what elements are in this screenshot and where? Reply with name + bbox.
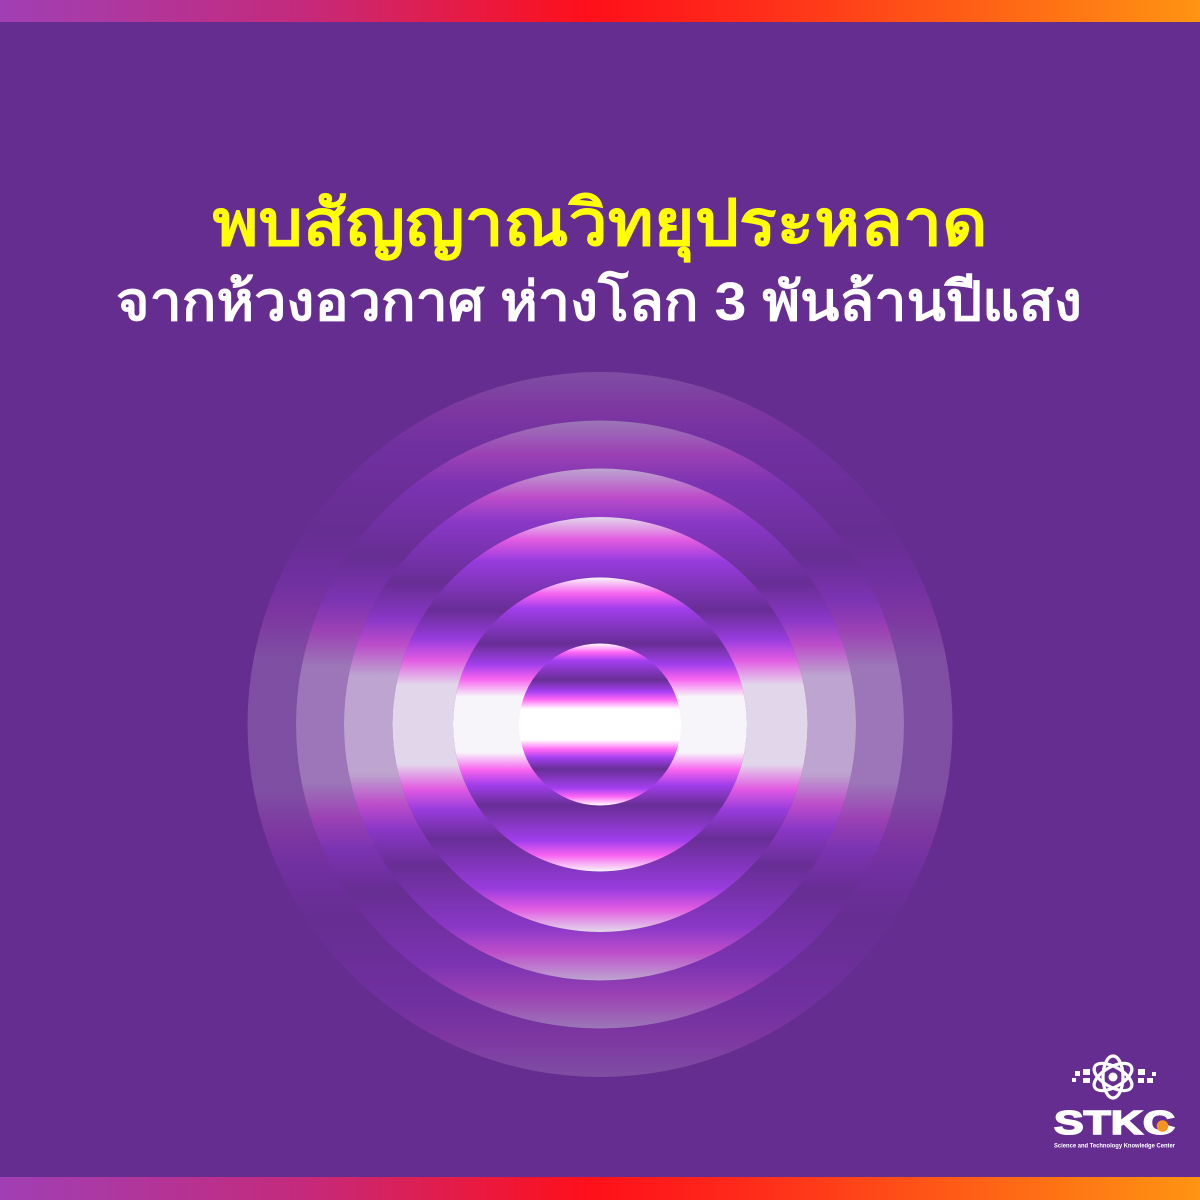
icon: atom <box>1072 1056 1156 1098</box>
icon: orange dot <box>1157 1120 1168 1132</box>
top gradient bar <box>0 0 1200 22</box>
logo tagline: Science and Technology Knowledge Center <box>1054 1142 1175 1150</box>
bottom gradient bar <box>0 1177 1200 1200</box>
title: พบสัญญาณวิทยุประหลาด <box>212 187 988 263</box>
logo wordmark: STKC <box>1054 1104 1175 1141</box>
logo: STKC <box>1054 1056 1175 1150</box>
radio signal rings <box>248 372 952 1077</box>
subtitle: จากห้วงอวกาศ ห่างโลก 3 พันล้านปีแสง <box>116 270 1082 332</box>
